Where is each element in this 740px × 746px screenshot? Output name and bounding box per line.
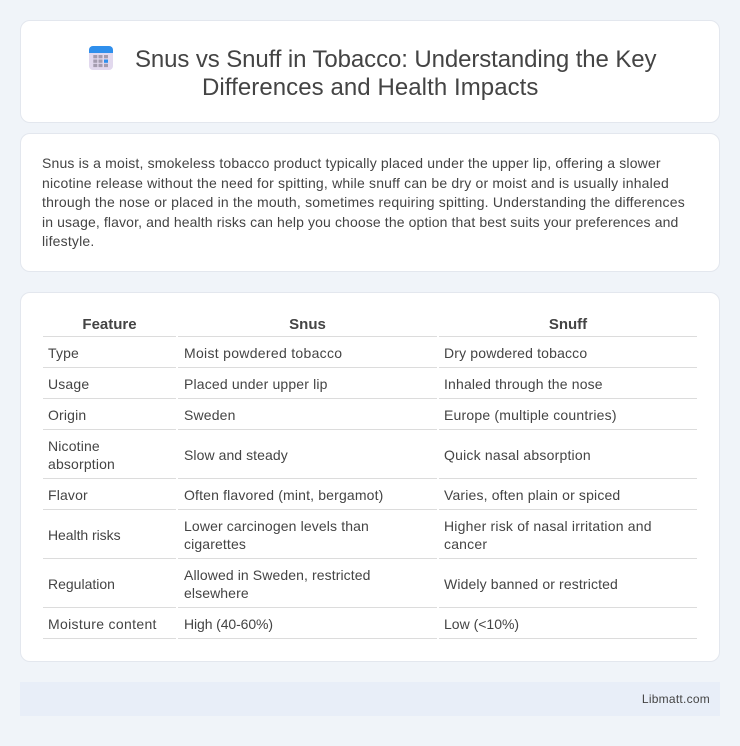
row: origin: Europe (multiple countries)	[444, 407, 617, 423]
comparison table	[43, 316, 697, 639]
title: Differences and Health Impacts	[202, 74, 538, 101]
table header: Feature	[82, 316, 137, 333]
row: nicotine absorption: Quick nasal absorption	[444, 447, 591, 463]
table header	[82, 316, 588, 333]
panel: title card	[20, 20, 720, 123]
row: usage: Placed under upper lip	[184, 376, 328, 392]
row: health risks: cigarettes	[184, 536, 246, 552]
row: moisture content	[48, 616, 519, 632]
row: regulation: Regulation	[48, 576, 115, 592]
row: flavor: Often flavored (mint, bergamot)	[184, 487, 383, 503]
icon: calendar	[89, 46, 113, 70]
row: type: Moist powdered tobacco	[184, 345, 342, 361]
row: health risks: Higher risk of nasal irritation and	[444, 518, 652, 534]
row: health risks: Lower carcinogen levels than	[184, 518, 369, 534]
panel: comparison table card	[20, 292, 720, 662]
intro text: nicotine release without the need for spitting, while snuff can be dry or moist and is usually inhaled	[42, 174, 669, 190]
intro text: lifestyle.	[42, 233, 94, 249]
row: regulation: Allowed in Sweden, restricted	[184, 567, 371, 583]
row: type: Dry powdered tobacco	[444, 345, 587, 361]
title	[135, 46, 656, 101]
intro text	[42, 155, 685, 249]
row: usage: Usage	[48, 376, 89, 392]
footer bar	[20, 682, 720, 716]
row: regulation: Widely banned or restricted	[444, 576, 618, 592]
row: nicotine absorption: Nicotine	[48, 438, 100, 454]
row: nicotine absorption	[48, 438, 591, 472]
intro text: Snus is a moist, smokeless tobacco product typically placed under the upper lip, offering a slower	[42, 155, 661, 171]
row: regulation	[48, 567, 618, 601]
title: Snus vs Snuff in Tobacco: Understanding the Key	[135, 46, 656, 73]
row: origin: Sweden	[184, 407, 236, 423]
panel: intro card	[20, 133, 720, 272]
row: usage	[48, 376, 603, 392]
row: origin	[48, 407, 617, 423]
row: health risks: Health risks	[48, 527, 121, 543]
row: flavor: Flavor	[48, 487, 88, 503]
row: health risks: cancer	[444, 536, 487, 552]
row: moisture content: Moisture content	[48, 616, 157, 632]
row: type	[48, 345, 587, 361]
row: moisture content: Low (<10%)	[444, 616, 519, 632]
row: flavor: Varies, often plain or spiced	[444, 487, 620, 503]
row: usage: Inhaled through the nose	[444, 376, 603, 392]
row: nicotine absorption: absorption	[48, 456, 115, 472]
footer credit: Libmatt.com	[642, 692, 710, 706]
table header: Snuff	[549, 316, 587, 333]
row: origin: Origin	[48, 407, 86, 423]
table header: Snus	[289, 316, 326, 333]
row: health risks	[48, 518, 652, 552]
intro text: in usage, flavor, and health risks can help you choose the option that best suits your preferences and	[42, 214, 678, 230]
row: regulation: elsewhere	[184, 585, 249, 601]
row: type: Type	[48, 345, 79, 361]
row: flavor	[48, 487, 620, 503]
row: moisture content: High (40-60%)	[184, 616, 273, 632]
intro text: through the nose or placed in the mouth, sometimes requiring spitting. Understanding the differences	[42, 194, 685, 210]
row: nicotine absorption: Slow and steady	[184, 447, 288, 463]
